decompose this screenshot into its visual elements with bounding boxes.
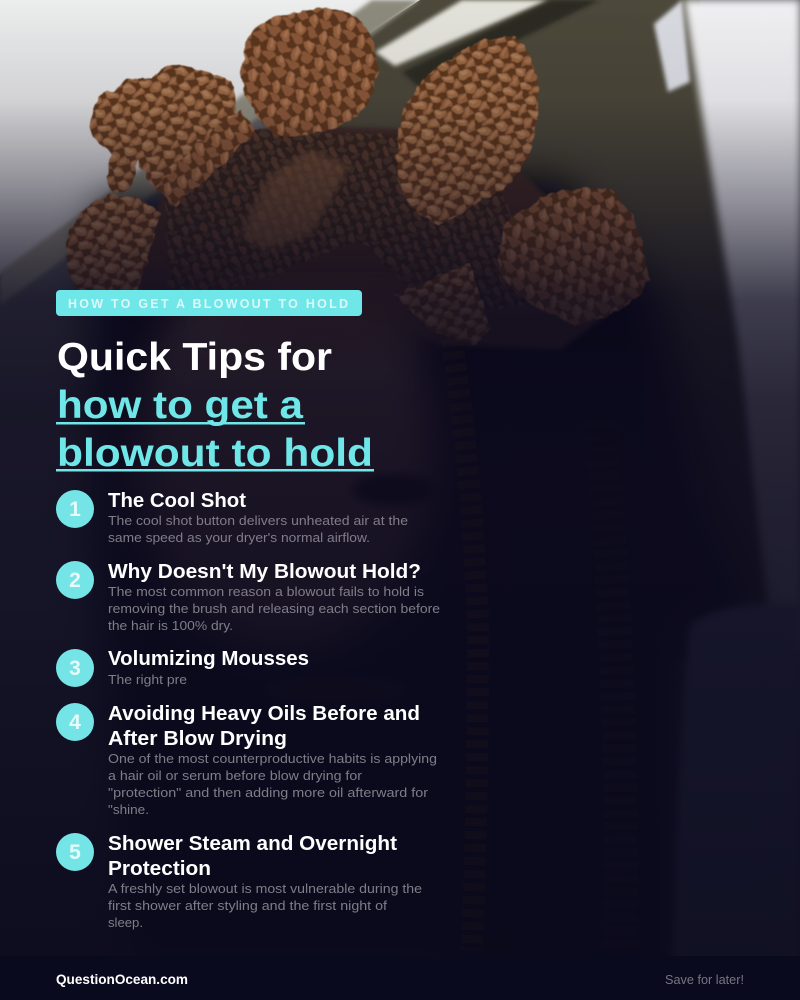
tip 4 [56, 703, 437, 817]
tip 4: After Blow Drying [108, 728, 287, 750]
tip 5: 5 [69, 841, 81, 864]
tip 3: The right pre [108, 672, 187, 687]
footer bar [0, 956, 800, 1000]
label pill [56, 290, 362, 316]
footer bar: Save for later! [665, 973, 744, 987]
label pill: HOW TO GET A BLOWOUT TO HOLD [68, 297, 348, 311]
tip 2: Why Doesn't My Blowout Hold? [108, 561, 421, 583]
tip 2: The most common reason a blowout fails to hold is [108, 584, 425, 599]
tip 4: "protection" and then adding more oil afterward for [108, 785, 429, 800]
tip 5: A freshly set blowout is most vulnerable during the [108, 881, 422, 896]
tip 2: removing the brush and releasing each section before [108, 601, 440, 616]
tip 4: "shine. [108, 802, 149, 817]
tip 3: Volumizing Mousses [108, 648, 309, 670]
tip 5: first shower after styling and the first night of [108, 898, 387, 913]
tip 3 [56, 648, 309, 687]
tip 1: 1 [69, 498, 81, 521]
tip 1 [56, 490, 408, 545]
tip 5 [56, 833, 422, 930]
tip 4: Avoiding Heavy Oils Before and [108, 703, 420, 725]
tip 1: The cool shot button delivers unheated air at the [108, 513, 408, 528]
icon: head and cornrows [110, 125, 640, 350]
tip 2: 2 [69, 569, 81, 592]
tip 2 [56, 561, 440, 633]
faint side braids [445, 300, 621, 950]
title: blowout to hold [57, 432, 373, 475]
title [56, 336, 374, 475]
tip 5: sleep. [108, 915, 143, 930]
footer bar: QuestionOcean.com [56, 971, 188, 987]
tip 4: a hair oil or serum before blow drying for [108, 768, 363, 783]
title: Quick Tips for [57, 336, 332, 379]
tip 2: the hair is 100% dry. [108, 618, 233, 633]
tip 1: same speed as your dryer's normal airflow. [108, 530, 370, 545]
icon: braided buns [66, 9, 648, 345]
tip 4: 4 [69, 711, 81, 734]
tip 5: Protection [108, 858, 211, 880]
tip 4: One of the most counterproductive habits is applying [108, 751, 437, 766]
tip 3: 3 [69, 657, 81, 680]
title: how to get a [57, 384, 303, 427]
tip 5: Shower Steam and Overnight [108, 833, 397, 855]
tip 1: The Cool Shot [108, 490, 246, 512]
